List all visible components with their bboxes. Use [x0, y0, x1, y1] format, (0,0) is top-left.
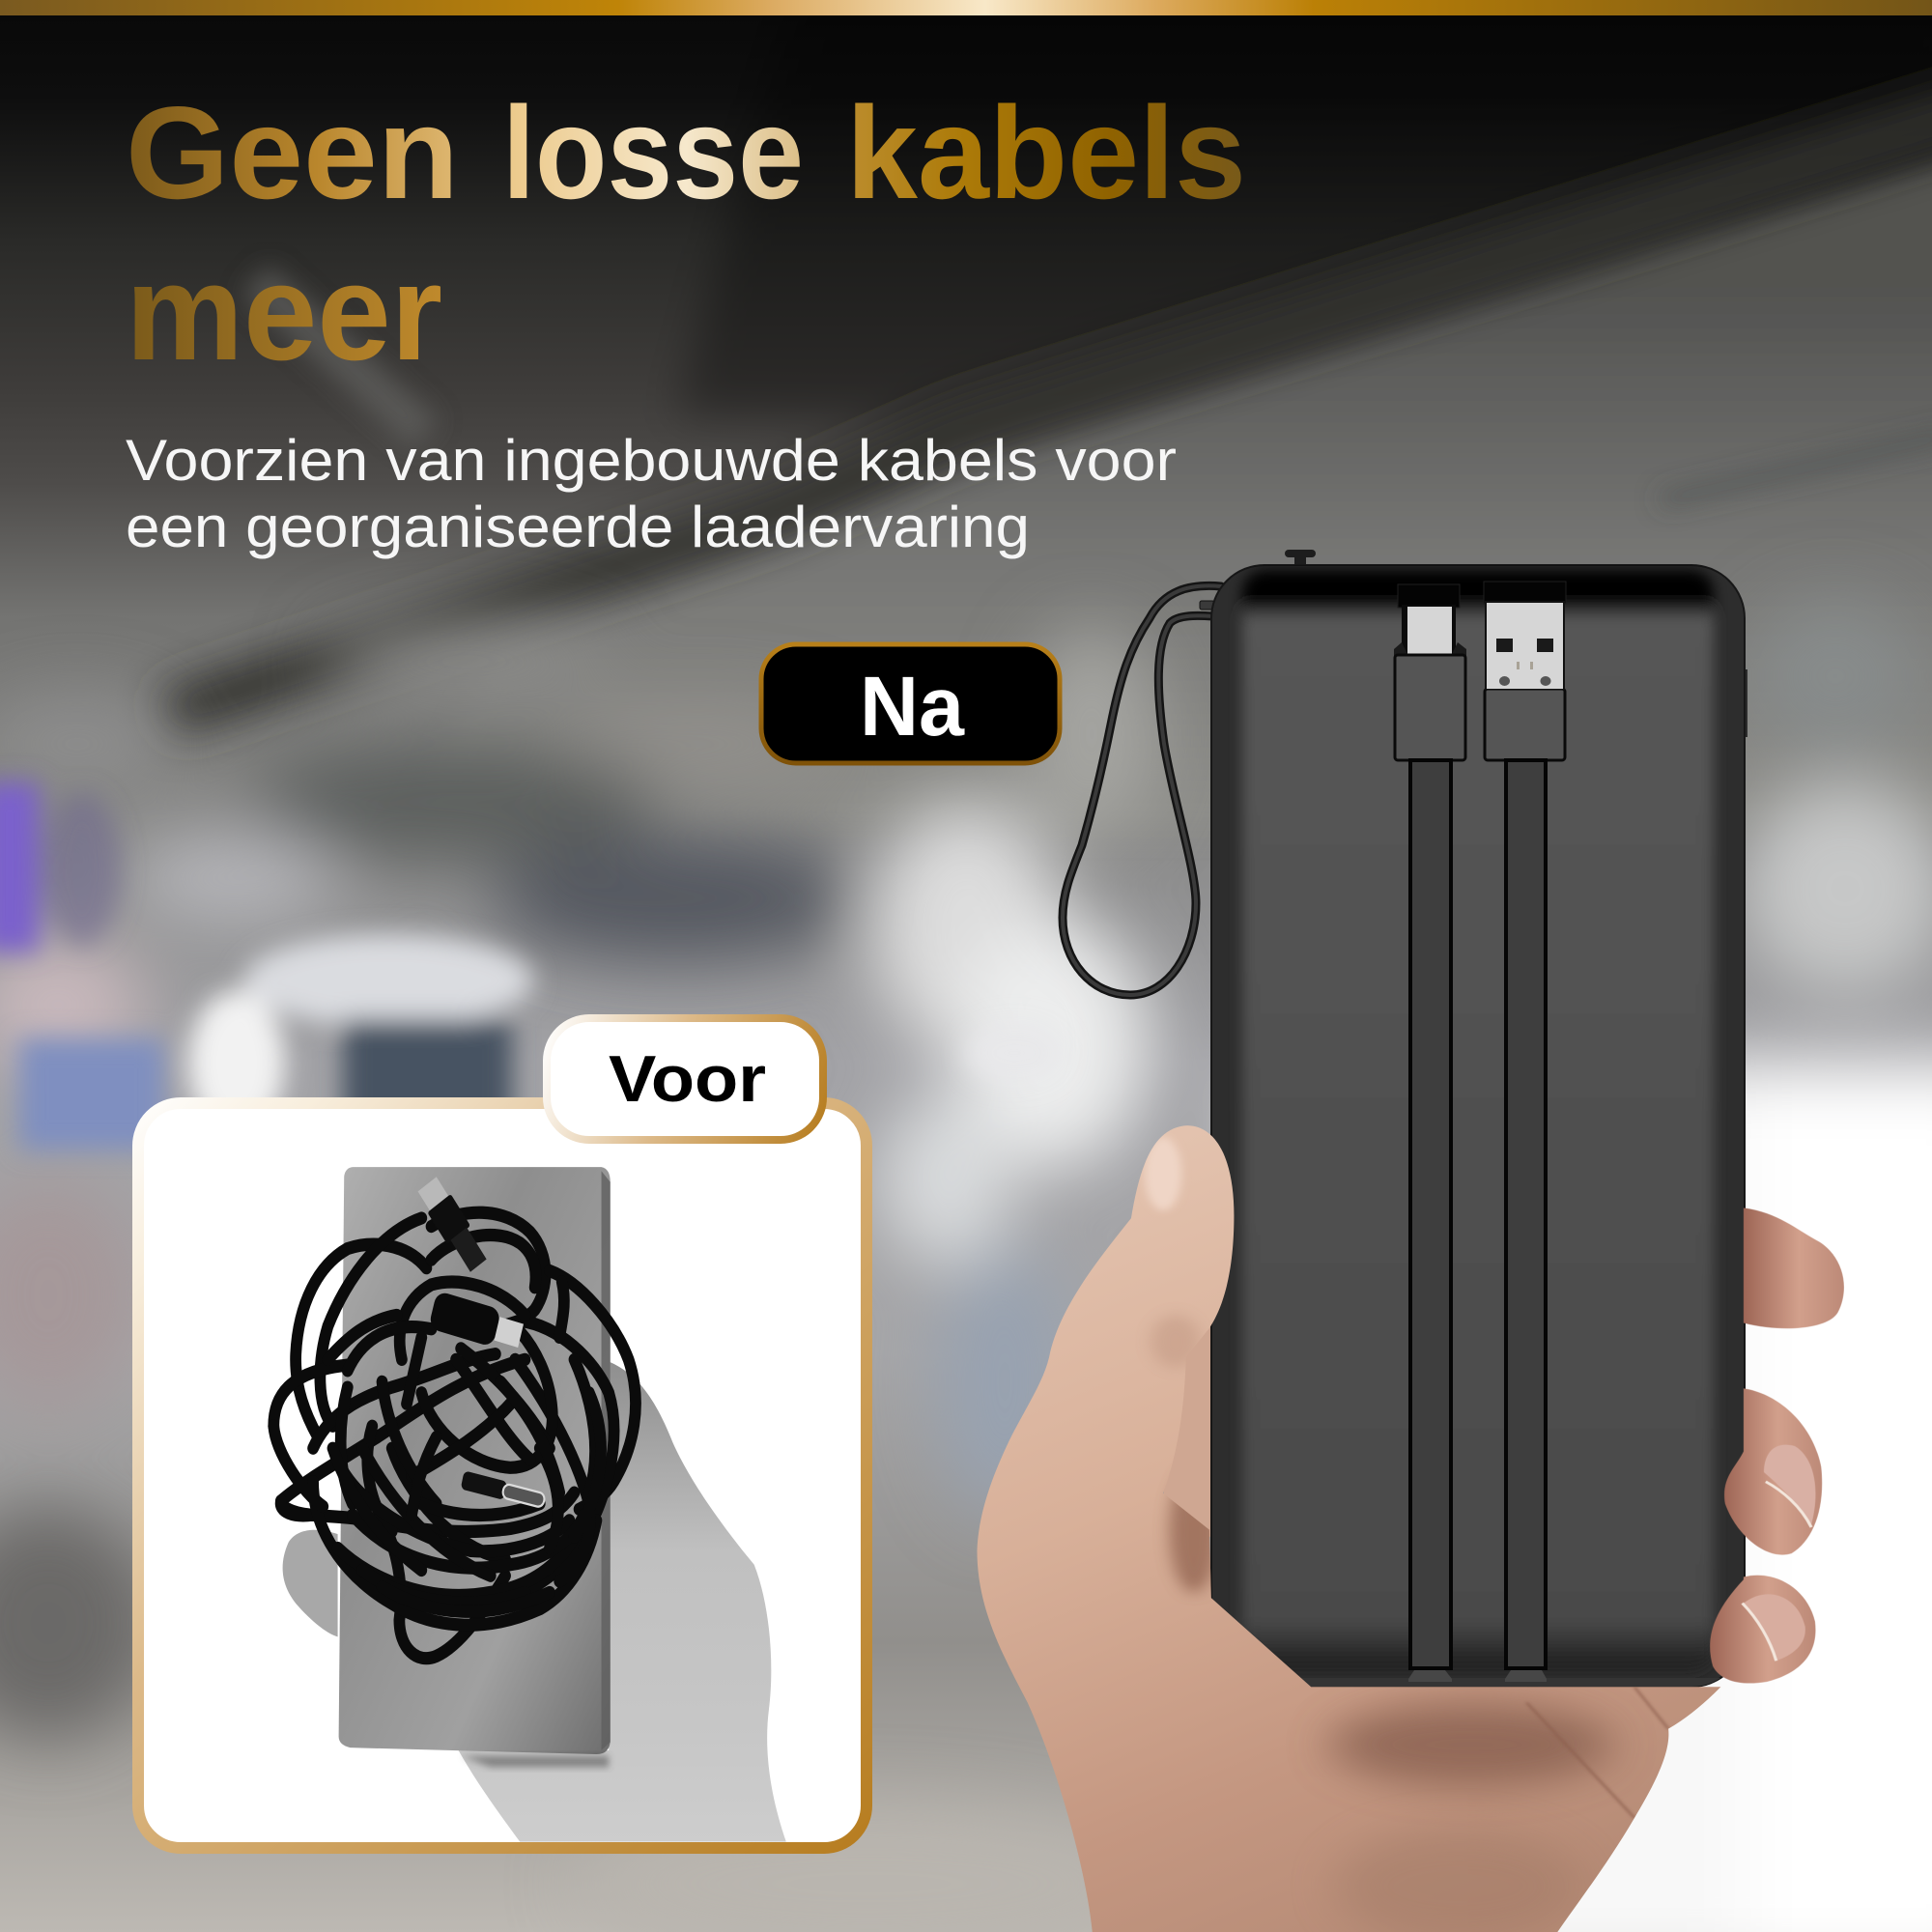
- grayscale hand: [283, 1359, 786, 1842]
- hand shading: [1145, 1137, 1668, 1932]
- power bank: [1211, 550, 1747, 1687]
- palm and thumb: [977, 1125, 1720, 1932]
- grayscale power bank: [339, 1167, 611, 1754]
- flat ribbon cable left: [1408, 760, 1452, 1682]
- title: kabels: [846, 79, 1246, 226]
- power bank body: [1211, 565, 1745, 1687]
- badge: Na: Na: [860, 660, 965, 753]
- card frame: [138, 1103, 867, 1848]
- before photo: tangled cables on power bank: [273, 1167, 786, 1842]
- title: losse: [502, 79, 804, 226]
- finger three: [1710, 1576, 1815, 1683]
- panel: before card: [138, 1103, 867, 1848]
- title: Geen: [126, 79, 459, 226]
- top pin: [1285, 550, 1316, 567]
- label tab: Voor: [547, 1018, 823, 1140]
- badge: Na: [761, 644, 1060, 763]
- title: [126, 79, 1246, 389]
- title: meer: [126, 236, 442, 389]
- subtitle: Voorzien van ingebouwde kabels voor: [126, 428, 1177, 493]
- subtitle: een georganiseerde laadervaring: [126, 495, 1030, 559]
- finger one: [1744, 1208, 1844, 1328]
- finger two: [1724, 1388, 1822, 1555]
- side button: [1743, 669, 1747, 737]
- flat ribbon cable right: [1505, 760, 1547, 1682]
- USB-C connector: [1394, 584, 1466, 760]
- integrated cable loop: [1063, 585, 1221, 995]
- hand web behind power bank: [1163, 1321, 1225, 1546]
- top gold bar: [0, 0, 1932, 15]
- tangled cables: [273, 1212, 636, 1659]
- Lightning connector: [431, 1293, 524, 1348]
- label tab: Voor: Voor: [609, 1042, 766, 1116]
- lower USB-C connector: [461, 1470, 546, 1510]
- power bank face: [1211, 570, 1745, 1687]
- USB-A connector: [1484, 582, 1566, 760]
- top USB-C connector: [415, 1175, 490, 1275]
- hand holding power bank: [977, 1125, 1844, 1932]
- subtitle: [126, 428, 1177, 559]
